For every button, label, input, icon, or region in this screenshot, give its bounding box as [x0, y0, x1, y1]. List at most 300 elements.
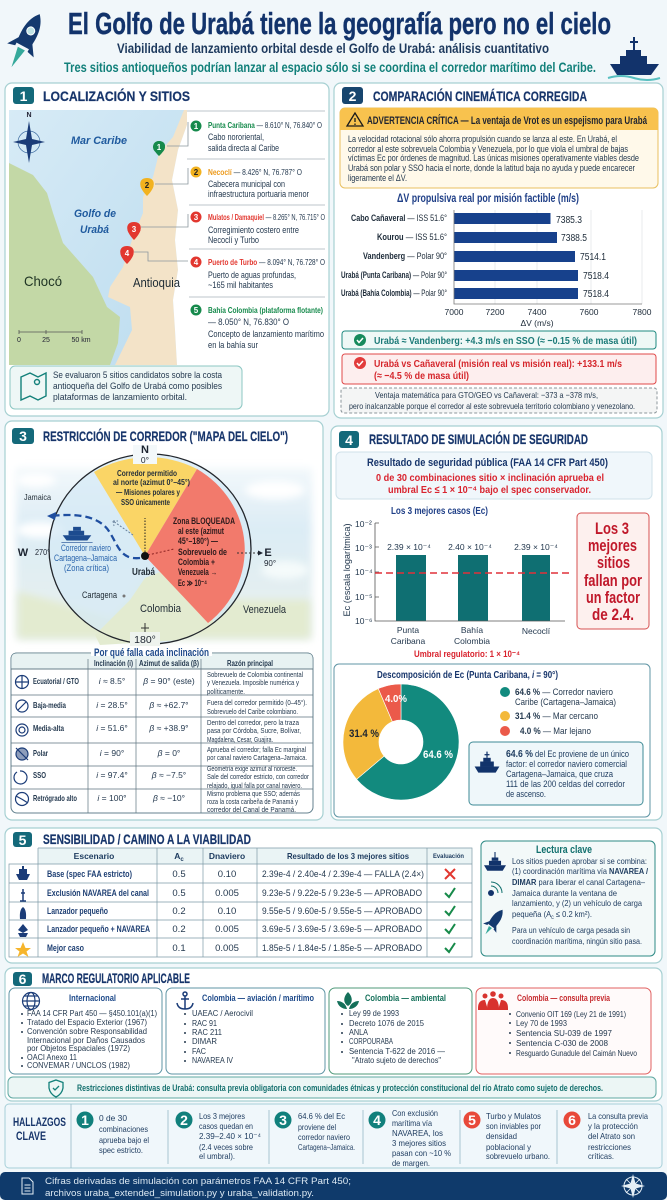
legend: 64.6 % — Corredor naviero: [515, 687, 613, 698]
callout: Urabá vs Cañaveral: [342, 354, 656, 384]
icon: ship in sky map: [61, 527, 93, 542]
categories: Bahía: [461, 625, 483, 635]
sky dome: [49, 454, 251, 644]
callout: factor 2.4: Los 3: [595, 519, 629, 538]
category labels: [341, 213, 447, 298]
compass labels: E: [264, 547, 272, 559]
decomposition title: Descomposición de Ec (Punta Caribana, i = 90°): [377, 669, 558, 681]
map: [9, 110, 192, 365]
panel: localización y sitios: [5, 83, 329, 416]
reasons: Aprueba el corredor; falla Ec marginal: [207, 745, 306, 754]
section number 4: 4: [345, 432, 353, 448]
threshold caption: Umbral regulatorio: 1 × 10⁻⁴: [414, 649, 520, 659]
result box: [336, 452, 652, 499]
callout: Urabá vs Cañaveral: (≈ −4.5 % de masa útil): [374, 370, 469, 382]
finding 2: 2.39–2.40 × 10⁻⁴: [199, 1131, 261, 1141]
callout: factor 2.4: [577, 513, 649, 629]
donut chart: 31.4 %: [349, 728, 379, 740]
body: Jamaica durante la ventana de: [512, 888, 617, 898]
Ac and Dnaviero values: 0.10: [218, 869, 236, 880]
label N 0°: 0°: [141, 455, 149, 465]
Ac and Dnaviero values: 0.5: [172, 888, 186, 899]
axis ticks: 7200: [486, 307, 505, 317]
finding 5: poblacional y: [486, 1142, 532, 1152]
label: Golfo de Urabá: Golfo de: [74, 208, 116, 220]
site 5: Concepto de lanzamiento marítimo: [208, 329, 324, 339]
section number 4: [339, 431, 359, 448]
body: c: [551, 915, 554, 921]
row names: Retrógrado alto: [33, 793, 77, 803]
lectura clave: [479, 841, 655, 956]
list: [509, 1010, 637, 1058]
legend: [500, 687, 616, 737]
compass labels: 180°: [134, 634, 156, 646]
site 2: infraestructura portuaria menor: [208, 189, 309, 199]
table header: c: [180, 857, 184, 863]
card: ambiental: [329, 988, 472, 1074]
list: "Atrato sujeto de derechos": [352, 1056, 441, 1065]
inclination table: [11, 647, 313, 814]
body: DIMAR para liberar el canal Cartagena–: [512, 877, 645, 887]
list: Convención sobre Responsabilidad: [27, 1027, 147, 1036]
section number 6: [13, 971, 32, 987]
callout text: [53, 370, 223, 403]
callout: single factor: factor: el corredor naviero comercial: [506, 759, 627, 769]
list: por Objetos Espaciales (1972): [27, 1044, 130, 1053]
compass labels: W: [18, 547, 29, 559]
legend: 4.0 % — Mar lejano: [520, 726, 591, 737]
list: Internacional por Daños Causados: [27, 1036, 145, 1045]
finding 1: [76, 1112, 149, 1155]
callout: Urabá vs Cañaveral: Urabá vs Cañaveral (misión real vs misión real): +133.1 m/s: [374, 358, 622, 370]
site 5: en la bahía sur: [208, 340, 258, 350]
reasons: relajado, igual falla por canal naviero.: [207, 781, 302, 790]
pin 2: [140, 178, 154, 196]
place labels: Cartagena: [82, 590, 117, 600]
results: 9.23e-5 / 9.22e-5 / 9.23e-5 — APROBADO: [262, 888, 422, 898]
azimuth values: β ≈ −10°: [152, 793, 185, 803]
panel: comparación cinemática: [334, 83, 663, 418]
note: GTO/GEO: Ventaja matemática para GTO/GEO vs Cañaveral: −373 a −378 m/s,: [375, 390, 598, 400]
permitted text: [113, 468, 190, 507]
axis labels: [355, 519, 373, 626]
site 2: [190, 166, 309, 199]
inclination values: [96, 676, 128, 803]
title: Lectura clave: [536, 844, 592, 856]
axis labels: 10⁻³: [355, 543, 372, 553]
icon: signal: [488, 882, 502, 896]
site 2: Cabecera municipal con: [208, 179, 285, 189]
body: Para un vehículo de carga pesada sin: [512, 925, 630, 935]
clouds and land: [16, 473, 310, 638]
site 3: Necoclí y Turbo: [208, 235, 259, 245]
scale bar: 25: [42, 337, 50, 344]
callout: factor 2.4: sitios: [597, 553, 630, 572]
warning box: [340, 108, 658, 188]
label: Golfo de Urabá: Urabá: [80, 224, 109, 236]
icon: document: [22, 1178, 33, 1194]
icon: rocket: [479, 905, 509, 939]
row names: Media-alta: [33, 723, 64, 733]
compass labels: 90°: [264, 559, 276, 568]
list: CONVEMAR / UNCLOS (1982): [27, 1061, 130, 1070]
reasons: Sale del corredor estricto, con corredor: [207, 772, 309, 781]
list: Sentencia SU-039 de 1997: [516, 1029, 613, 1038]
icon: leaf: [337, 992, 359, 1009]
arrow: shipping corridor: [47, 512, 140, 558]
Ac and Dnaviero values: 0.2: [172, 906, 186, 917]
header: [0, 6, 660, 80]
list: RAC 211: [192, 1028, 223, 1037]
callout text: antioqueña del Golfo de Urabá como posibles: [53, 381, 222, 392]
callout: factor 2.4: de 2.4.: [592, 605, 634, 624]
icon: globe: [22, 992, 40, 1010]
site 2: Necoclí — 8.426° N, 76.787° O: [208, 168, 302, 177]
permitted text: — Misiones polares y: [116, 487, 180, 497]
callout: single factor: 111 de las 200 celdas del corredor: [506, 779, 625, 789]
body: lanzamiento, y (2) un vehículo de carga: [512, 898, 642, 908]
icon: warning: [347, 113, 363, 126]
label N 0°: [141, 444, 149, 465]
title: CLAVE: [16, 1131, 46, 1143]
table header: Evaluación: [433, 853, 464, 860]
compass rose: [13, 112, 45, 163]
site 5: — 8.050° N, 76.830° O: [208, 317, 289, 327]
body: Los sitios pueden aprobar si se combina:: [512, 856, 647, 866]
finding 3: [274, 1111, 355, 1152]
site 1: Cabo nororiental,: [208, 132, 264, 142]
legend: 31.4 % — Mar cercano: [515, 711, 598, 722]
corridor label: (Zona crítica): [64, 563, 109, 573]
table title: Por qué falla cada inclinación: [94, 647, 209, 659]
finding 4: pasan con ~10 %: [392, 1148, 451, 1158]
Ac and Dnaviero values: 0.10: [218, 906, 236, 917]
category labels: Vandenberg — Polar 90°: [363, 251, 447, 261]
dotted guide lines: [144, 518, 146, 552]
finding 4: [368, 1108, 451, 1168]
panel: sensibilidad: [5, 828, 662, 963]
card title: Colombia — consulta previa: [517, 993, 611, 1004]
legend: Caribe (Cartagena–Jamaica): [515, 697, 616, 708]
list: CORPOURABA: [349, 1037, 394, 1046]
results: [262, 869, 424, 953]
site 4: ~165 mil habitantes: [208, 280, 273, 290]
blocked text: Sobrevuelo de: [178, 547, 227, 557]
Ac and Dnaviero values: 0.2: [172, 924, 186, 935]
finding 2: casos quedan en: [199, 1121, 253, 1131]
decomposition panel: [334, 664, 650, 817]
card title: Colombia — aviación / marítimo: [202, 993, 314, 1004]
section number 1: 1: [20, 88, 28, 104]
inclination values: i = 28.5°: [96, 700, 128, 710]
category labels: Urabá (Bahía Colombia) — Polar 90°: [341, 288, 447, 298]
table header: Inclinación (i): [94, 659, 133, 668]
axis ticks: 7800: [633, 307, 652, 317]
list: Sentencia C-030 de 2008: [516, 1039, 609, 1048]
note: GTO/GEO: [341, 388, 657, 413]
site 3: Corregimiento costero entre: [208, 225, 299, 235]
list: FAA 14 CFR Part 450 — §450.101(a)(1): [27, 1009, 157, 1018]
list: Ley 99 de 1993: [349, 1009, 399, 1018]
panel: resultado de simulación: [331, 426, 662, 820]
blocked text: Venezuela →: [178, 567, 217, 577]
list: FAC: [192, 1047, 206, 1056]
footer: [0, 1172, 667, 1200]
label: Golfo de Urabá: [74, 208, 116, 236]
table header: Escenario: [74, 851, 114, 861]
azimuth values: [142, 676, 195, 803]
Ac and Dnaviero values: 0.5: [172, 869, 186, 880]
finding 6: y la protección: [588, 1121, 638, 1131]
section number 6: 6: [19, 971, 27, 987]
bar values: 2.39 × 10⁻⁴: [514, 542, 558, 552]
category labels: Urabá (Punta Caribana) — Polar 90°: [341, 270, 447, 280]
blocked text: 45°–180°) —: [178, 536, 218, 546]
azimuth values: β ≈ +62.7°: [148, 700, 189, 710]
finding 2: (2.4 veces sobre: [199, 1142, 253, 1152]
label: Chocó: Chocó: [24, 273, 62, 289]
site 3: Mulatos / Damaquiel — 8.265° N, 76.715° O: [208, 213, 325, 222]
pin 1: 1: [157, 143, 162, 152]
Ac and Dnaviero values: 0.005: [215, 924, 239, 935]
finding 4: de margen.: [392, 1158, 430, 1168]
threshold line: [375, 572, 572, 574]
card title: Colombia — ambiental: [365, 993, 446, 1004]
axis ticks: 7400: [528, 307, 547, 317]
chart title: Los 3 mejores casos (Ec): [391, 506, 488, 517]
permitted text: SSO únicamente: [121, 497, 170, 507]
row names: Baja-media: [33, 700, 66, 710]
heading: LOCALIZACIÓN Y SITIOS: [43, 87, 190, 104]
site 1: [190, 120, 322, 153]
heading: RESTRICCIÓN DE CORREDOR ("MAPA DEL CIELO"): [43, 427, 288, 444]
table header: [74, 851, 464, 863]
bar values: 2.39 × 10⁻⁴: [387, 542, 431, 552]
row names: SSO: [33, 770, 46, 780]
panel: marco regulatorio: [5, 968, 662, 1101]
finding 3: corredor naviero: [298, 1132, 350, 1142]
site 4: 4: [194, 258, 199, 267]
Ac and Dnaviero values: [172, 869, 239, 954]
reasons: corredor del Canal de Panamá.: [207, 805, 296, 814]
icon: ship: [608, 37, 660, 80]
value labels: 7518.4: [583, 271, 609, 282]
callout: single factor: de ascenso.: [506, 789, 546, 799]
finding 1: 1: [81, 1112, 89, 1128]
heading: MARCO REGULATORIO APLICABLE: [42, 970, 190, 986]
list: Sentencia T-622 de 2016 —: [349, 1047, 445, 1056]
card: internacional: [9, 988, 162, 1074]
blocked text: al este (azimut: [178, 526, 224, 536]
results: 9.55e-5 / 9.60e-5 / 9.55e-5 — APROBADO: [262, 906, 422, 916]
site 3: 3: [194, 213, 199, 222]
azimuth values: β = 0°: [157, 748, 180, 758]
section number 5: 5: [19, 832, 27, 848]
finding 4: 3 mejores sitios: [392, 1138, 446, 1148]
blocked text: Zona BLOQUEADA: [173, 516, 235, 526]
list: Ley 70 de 1993: [516, 1019, 567, 1028]
value labels: [556, 215, 609, 300]
value labels: 7514.1: [580, 252, 606, 263]
axis ticks: 7000: [445, 307, 464, 317]
pin 2: 2: [145, 181, 150, 190]
subtitle: Viabilidad de lanzamiento orbital desde el Golfo de Urabá: análisis cuantitativo: [117, 40, 549, 56]
icon: compass: [621, 1174, 645, 1198]
axis ticks: 7600: [580, 307, 599, 317]
section number 2: 2: [349, 88, 357, 104]
scale bar: [17, 330, 91, 344]
finding 1: 0 de 30: [99, 1113, 127, 1123]
finding 1: aprueba bajo el: [99, 1135, 149, 1145]
title: [13, 1117, 66, 1143]
Ac and Dnaviero values: 0.1: [172, 943, 186, 954]
label N 0°: N: [141, 444, 149, 456]
finding 5: densidad: [486, 1131, 517, 1141]
row icons: [14, 676, 28, 806]
value labels: 7385.3: [556, 215, 582, 226]
result box: 0 de 30 combinaciones sitio × inclinación aprueba el: [376, 472, 604, 484]
compass rose: N: [26, 112, 32, 119]
reasons: Fuera del corredor permitido (0–45°).: [207, 698, 307, 707]
callout: 5 sitios: [10, 366, 242, 409]
list: [21, 1009, 157, 1070]
callout: factor 2.4: mejores: [588, 536, 637, 555]
blocked text: Ec ≫ 10⁻⁴: [178, 578, 207, 588]
azimuth values: β ≈ −7.5°: [151, 770, 186, 780]
scale bar: 0: [17, 337, 21, 344]
site 4: Puerto de Turbo — 8.094° N, 76.728° O: [208, 258, 325, 267]
icon: rocket: [0, 7, 53, 74]
finding 3: Cartagena–Jamaica.: [298, 1142, 355, 1152]
finding 5: Turbo y Mulatos: [486, 1111, 541, 1121]
finding 1: combinaciones: [99, 1124, 148, 1134]
inclination values: i = 100°: [97, 793, 127, 803]
callout: single factor: Cartagena–Jamaica, que cruza: [506, 769, 613, 779]
panel: restricción de corredor: [5, 421, 323, 820]
list: ANLA: [349, 1028, 369, 1037]
reasons: políticamente.: [207, 687, 245, 696]
section number 2: [342, 87, 363, 104]
finding 1: spec estricto.: [99, 1145, 143, 1155]
scale bar: 50 km: [71, 337, 91, 344]
finding 2: 2: [180, 1112, 188, 1128]
icon: anchor: [177, 992, 193, 1009]
axis labels: 10⁻²: [355, 519, 372, 529]
finding 4: marítima vía: [392, 1118, 432, 1128]
icon: people: [478, 991, 508, 1010]
scenario names: Mejor caso: [47, 943, 84, 953]
list: UAEAC / Aerocivil: [192, 1009, 253, 1018]
reasons: Magdalena, Cesar, Guajira.: [207, 735, 273, 744]
list: [341, 1009, 445, 1065]
finding 2: [176, 1111, 261, 1161]
list: OACI Anexo 11: [27, 1053, 77, 1062]
site 4: [190, 256, 325, 290]
site 1: 1: [194, 122, 199, 131]
chart title: ΔV propulsiva real por misión factible (m/s): [397, 191, 579, 205]
categories: Caribana: [391, 636, 426, 646]
scenario names: Exclusión NAVAREA del canal: [47, 888, 149, 898]
reasons: Sobrevuelo de Colombia continental: [207, 670, 303, 679]
source text: Cifras derivadas de simulación con parámetros FAA 14 CFR Part 450;: [45, 1176, 351, 1187]
pin 4: 4: [125, 249, 130, 258]
scenario names: [47, 869, 150, 953]
callout text: Se evaluaron 5 sitios candidatos sobre la costa: [53, 370, 223, 381]
donut chart: 4.0%: [385, 693, 408, 705]
section number 3: [12, 428, 34, 444]
finding 6: críticas.: [588, 1151, 614, 1161]
icon: shield: [49, 1080, 63, 1097]
categories: Necoclí: [522, 626, 551, 636]
label: Antioquia: Antioquia: [133, 275, 181, 290]
corridor label: Cartagena–Jamaica: [54, 553, 117, 563]
site 1: Punta Caribana — 8.610° N, 76.840° O: [208, 121, 322, 130]
reasons: pasa por Córdoba, Sucre, Bolívar,: [207, 726, 301, 735]
row names: Ecuatorial / GTO: [33, 676, 79, 686]
label: Mar Caribe: Mar Caribe: [71, 135, 127, 147]
list: Resguardo Gunadule del Caimán Nuevo: [516, 1049, 637, 1058]
finding 4: NAVAREA, los: [392, 1128, 443, 1138]
site 5: [190, 304, 324, 350]
finding 5: [464, 1111, 550, 1161]
donut chart: [343, 684, 459, 800]
reasons: Dentro del corredor, pero la traza: [207, 718, 300, 727]
donut chart: 64.6 %: [423, 749, 453, 761]
axis labels: 10⁻⁶: [355, 616, 372, 626]
callout text: plataformas de lanzamiento orbital.: [53, 392, 187, 403]
finding 6: del Atrato son: [588, 1131, 635, 1141]
finding 3: 64.6 % del Ec: [298, 1111, 346, 1121]
reasons: y Venezuela. Imposible numérica y: [207, 678, 299, 687]
result box: umbral Ec ≤ 1 × 10⁻⁴ bajo el spec conservador.: [388, 484, 591, 496]
axis ticks: ΔV (m/s): [520, 318, 554, 328]
source text: archivos uraba_extended_simulation.py y uraba_validation.py.: [45, 1188, 314, 1199]
finding 5: son inviables por: [486, 1121, 541, 1131]
finding 6: 6: [568, 1112, 576, 1128]
warning body: ligeramente el ΔV.: [348, 173, 407, 183]
body: (1) coordinación marítima vía NAVAREA /: [512, 866, 648, 876]
icon: map pin: [21, 373, 46, 400]
result box: Resultado de seguridad pública (FAA 14 CFR Part 450): [367, 457, 608, 469]
table header: [94, 659, 273, 668]
source text: [45, 1176, 351, 1199]
finding 5: sobrevuelo urbano.: [486, 1151, 550, 1161]
callout: Urabá ≈ Vandenberg: [342, 331, 656, 349]
results: 2.39e-4 / 2.40e-4 / 2.39e-4 — FALLA (2.4×): [262, 869, 424, 879]
row names: Polar: [33, 748, 48, 758]
table header: Razón principal: [227, 659, 273, 668]
finding 5: 5: [468, 1112, 476, 1128]
azimuth values: β = 90° (este): [142, 676, 195, 686]
heading: SENSIBILIDAD / CAMINO A LA VIABILIDAD: [43, 831, 251, 847]
reasons: Sobrevuelo del Caribe colombiano.: [207, 707, 298, 716]
list: RAC 91: [192, 1019, 217, 1028]
permitted text: al norte (azimut 0°–45°): [113, 477, 190, 487]
place labels: [24, 492, 287, 616]
section number 1: [13, 87, 34, 104]
sky map: [16, 444, 312, 646]
list: DIMAR: [192, 1037, 217, 1046]
warning body: [348, 134, 639, 183]
row names: [33, 676, 79, 803]
finding 4: Con exclusión: [392, 1108, 438, 1118]
finding 6: restricciones: [588, 1142, 631, 1152]
bar values: [387, 542, 558, 552]
pin 4: [120, 246, 134, 264]
place labels: Jamaica: [24, 492, 51, 502]
category labels: Kourou — ISS 51.6°: [377, 232, 447, 242]
site 3: [190, 212, 325, 245]
